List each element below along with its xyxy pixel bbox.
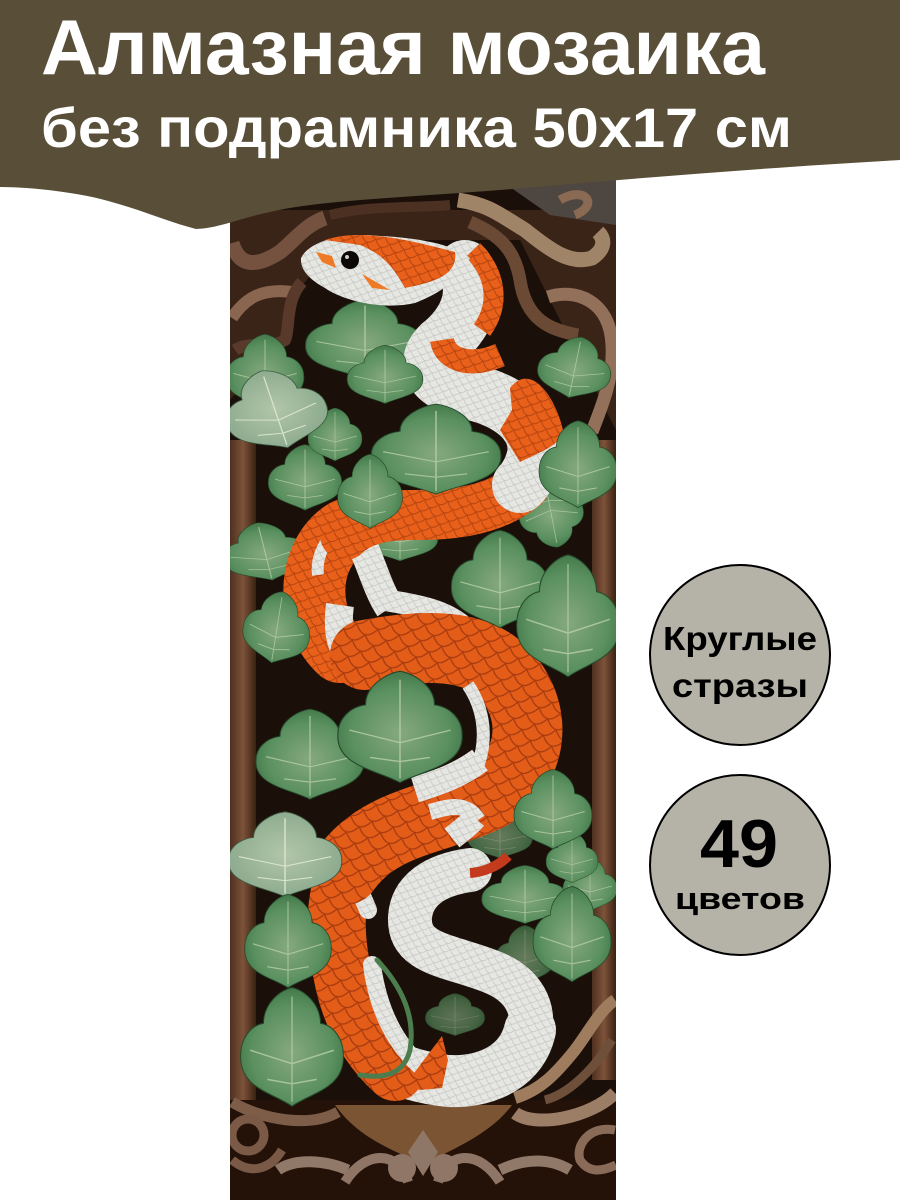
subtitle: без подрамника 50х17 см <box>41 96 792 159</box>
back leaves <box>215 300 618 1036</box>
background: carved wooden frame <box>230 180 616 1200</box>
badge: round rhinestones <box>650 565 830 745</box>
picture: snake and ivy diamond mosaic artwork <box>212 180 619 1200</box>
snake left bend <box>314 525 465 674</box>
snake middle body <box>345 648 527 870</box>
badge: 49 colours: 49 <box>700 806 778 882</box>
header banner <box>0 0 900 229</box>
snake head <box>301 235 470 306</box>
snake upper body <box>345 250 563 535</box>
front leaves <box>212 334 619 1106</box>
badge: round rhinestones: Круглые <box>663 620 817 657</box>
badge: 49 colours <box>650 775 830 955</box>
snake tail: white coil <box>385 856 531 1081</box>
snake lower body: orange <box>337 872 448 1090</box>
title: Алмазная мозаика <box>41 3 766 91</box>
badge: round rhinestones: стразы <box>672 667 808 704</box>
bottom carved ornament <box>230 1100 616 1200</box>
badge: 49 colours: цветов <box>675 881 805 916</box>
snake <box>301 235 563 1090</box>
